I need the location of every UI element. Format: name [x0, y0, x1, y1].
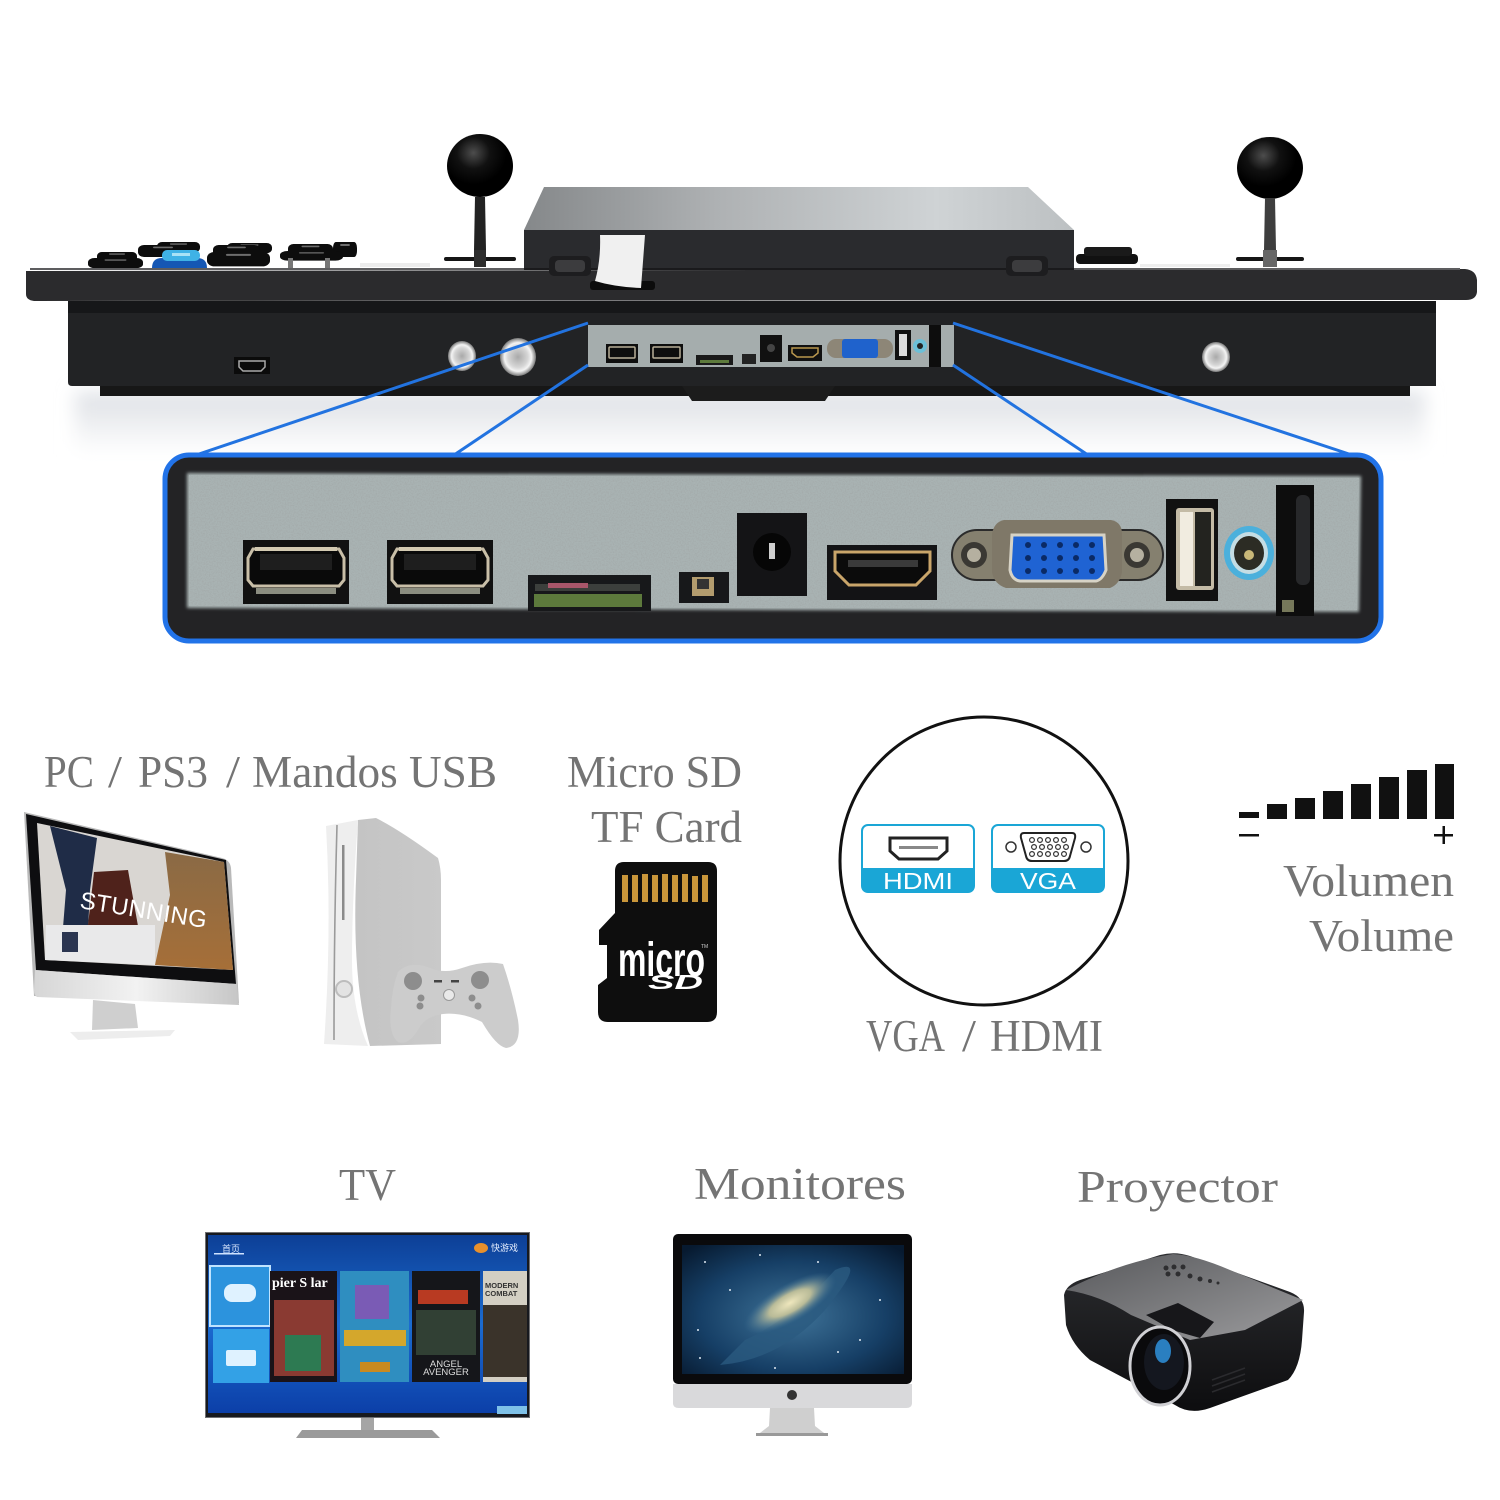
lid [524, 187, 1074, 276]
control buttons [1164, 1264, 1220, 1284]
right joystick [1236, 137, 1304, 267]
body [1064, 1253, 1304, 1411]
HDMI badge [862, 825, 974, 894]
label: VGA / HDMI [866, 1011, 1103, 1061]
console body [355, 818, 441, 1046]
hdmi port [827, 545, 937, 600]
icon: television with game menu: 首页 [222, 1243, 240, 1254]
icon: micro SD card [598, 862, 717, 1022]
metal buttons [448, 338, 1230, 376]
side port [234, 357, 270, 374]
blue zoom lines [196, 323, 1352, 455]
VGA badge [992, 825, 1104, 894]
side slot [1276, 485, 1314, 616]
icon: television with game menu: 快游戏 [491, 1242, 518, 1253]
bag [88, 870, 138, 930]
label: TV: TV [339, 1160, 396, 1210]
screen base [37, 823, 233, 970]
usb port 1 [243, 540, 349, 604]
label: Volumen Volume [1283, 856, 1454, 961]
micro sd slot [528, 575, 651, 611]
label: PC / PS3 / Mandos USB: PS3 [138, 747, 208, 797]
console front [324, 820, 368, 1046]
icon: micro SD card: TM [701, 944, 708, 950]
lens [1130, 1327, 1190, 1405]
icon: desktop computer [24, 812, 239, 1040]
label: PC / PS3 / Mandos USB: / [226, 747, 241, 797]
label: VGA / HDMI: VGA [866, 1011, 945, 1061]
lens hood [1146, 1303, 1214, 1338]
label: Volumen Volume: Volume [1309, 911, 1454, 961]
wood wall [155, 852, 233, 970]
label: PC / PS3 / Mandos USB [44, 747, 497, 797]
left joystick [444, 134, 516, 267]
audio jack [1224, 526, 1274, 580]
icon: television with game menu [205, 1232, 530, 1438]
icon: television with game menu: COMBAT [485, 1289, 518, 1298]
vertical usb port [1166, 499, 1218, 601]
label: Micro SD TF Card: Micro SD [567, 747, 742, 797]
dc jack [737, 513, 807, 596]
label: PC / PS3 / Mandos USB: Mandos USB [252, 747, 497, 797]
icon: television with game menu: MODERN [485, 1281, 518, 1290]
label: Proyector: Proyector [1077, 1162, 1278, 1212]
icon: television with game menu: pier S lar [272, 1276, 328, 1291]
vents [1212, 1368, 1245, 1392]
icon: projector [1064, 1253, 1304, 1411]
icon: desktop monitor with galaxy [673, 1234, 912, 1436]
top surface [1066, 1254, 1303, 1340]
jeans [50, 826, 97, 950]
on-screen text: STUNNING [78, 887, 209, 934]
silver frame [24, 812, 239, 1003]
black bezel [26, 814, 236, 984]
label: PC / PS3 / Mandos USB: PC [44, 747, 94, 797]
floor shadow [75, 392, 1425, 454]
label: Monitores: Monitores [694, 1159, 906, 1209]
stand [92, 1000, 138, 1030]
usb port 2 [387, 540, 493, 604]
label: VGA / HDMI: / [962, 1011, 977, 1061]
blue button [152, 258, 207, 268]
icon: television with game menu: ANGEL [430, 1359, 462, 1370]
VGA badge: VGA [1020, 868, 1077, 894]
label: VGA / HDMI: HDMI [990, 1011, 1103, 1061]
icon: micro SD card: micro [618, 934, 705, 987]
body [68, 301, 1436, 386]
label: Micro SD TF Card: TF Card [591, 802, 742, 852]
metal plate [187, 473, 1361, 612]
left buttons cluster [88, 242, 430, 268]
icon: television with game menu: AVENGER [423, 1367, 469, 1378]
floor [45, 925, 155, 965]
controller [390, 963, 519, 1048]
label: PC / PS3 / Mandos USB: / [108, 747, 123, 797]
label: Micro SD TF Card [567, 747, 742, 852]
label: Volumen Volume: Volumen [1283, 856, 1454, 906]
icon: micro SD card: SD [648, 972, 703, 994]
HDMI badge: HDMI [883, 868, 953, 894]
product photo: arcade console [26, 134, 1477, 454]
icon: volume bars [1239, 764, 1454, 844]
icon: game console with controller [324, 818, 519, 1048]
small port panel [588, 325, 954, 367]
vga port [952, 520, 1163, 588]
small button [679, 572, 729, 603]
enlarged port panel [165, 455, 1381, 641]
control panel top [26, 269, 1477, 301]
icon: circle with HDMI and VGA ports [840, 717, 1128, 1005]
chin [34, 970, 239, 1005]
right buttons [1076, 247, 1230, 267]
white strap [590, 281, 655, 290]
